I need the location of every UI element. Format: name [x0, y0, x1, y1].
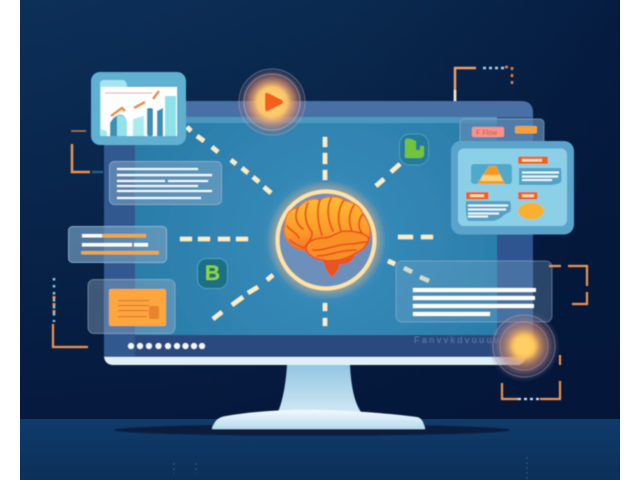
- monitor base: [212, 410, 425, 429]
- panel: orange document: [88, 280, 175, 334]
- orange bracket bottom right: [502, 355, 560, 399]
- dots indicator: [128, 343, 205, 349]
- orange bracket lower right: [549, 266, 587, 304]
- trend arrows: [105, 91, 159, 116]
- monitor stand: [278, 365, 361, 412]
- orange bracket upper left: [71, 131, 103, 172]
- orange bracket lower left: [53, 278, 88, 347]
- panel: right card: [451, 141, 574, 234]
- panel: text block upper left: [110, 162, 222, 204]
- monitor frame: [104, 101, 533, 357]
- icon: green B badge: B: [205, 262, 220, 285]
- label and text lower left: [466, 192, 511, 221]
- monitor bottom bezel: [104, 357, 525, 365]
- bar chart: [101, 96, 176, 136]
- pyramid thumbnail: [471, 164, 512, 184]
- label and oval lower right: [518, 192, 544, 220]
- brain ring: [266, 180, 386, 300]
- icon: green B badge: [198, 258, 228, 288]
- panel: tab behind right card: F Flow: [476, 130, 498, 137]
- panel: tab behind right card: [460, 119, 544, 147]
- connector dashes: [180, 127, 433, 326]
- icon: brain: [284, 197, 370, 277]
- icon: green L badge: [400, 134, 428, 165]
- label and text top right: [518, 156, 562, 185]
- monitor screen: [135, 117, 497, 335]
- panel: text block middle left: [68, 226, 166, 262]
- floor shadow: [114, 424, 510, 436]
- panel: text block lower right: [396, 261, 552, 322]
- panel: chart card: [91, 72, 186, 145]
- floor reflection marks: [174, 457, 527, 480]
- icon: play button: [239, 69, 305, 135]
- orange bracket upper right: [455, 67, 512, 101]
- glow light: [488, 310, 560, 382]
- faint caption row: Fanvvkdvuuuu: [414, 335, 501, 345]
- floor band: [20, 419, 620, 480]
